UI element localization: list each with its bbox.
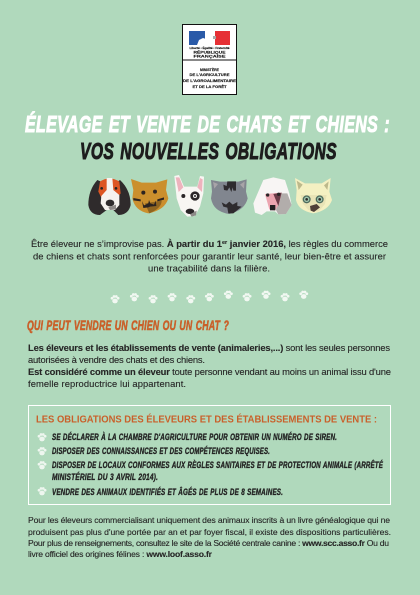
logo text xyxy=(183,45,237,89)
icon: poodle xyxy=(253,177,292,215)
logo text: ET DE LA FORÊT xyxy=(192,84,227,89)
text block: who can sell xyxy=(28,342,391,389)
logo: ministère xyxy=(182,24,237,94)
icon: beagle dog xyxy=(88,178,131,215)
logo text: FRANÇAISE xyxy=(194,54,226,58)
logo text: RÉPUBLIQUE xyxy=(194,50,226,54)
intro text block: Être éleveur ne s’improvise pas. À partir du 1 xyxy=(31,238,222,249)
text block: who can sell: femelle reproductrice lui appartenant. xyxy=(28,378,186,389)
intro text block: janvier 2016, xyxy=(227,238,286,249)
text block: who can sell: Est considéré comme un éleveur toute personne vendant au moins un animal issu d'une xyxy=(28,366,391,377)
footer note: livre officiel des origines félines : www.loof.asso.fr xyxy=(28,549,213,559)
icon: siamese cat xyxy=(295,178,332,213)
heading: qui peut vendre: QUI PEUT VENDRE UN CHIEN OU UN CHAT ? xyxy=(27,318,229,333)
intro text block: de chiens et chats sont renforcées pour garantir leur santé, leur bien-être et assurer xyxy=(33,250,386,262)
obligations list: DISPOSER DES CONNAISSANCES ET DES COMPÉTENCES REQUISES. xyxy=(52,445,270,456)
bullet paw icons xyxy=(38,433,46,495)
title xyxy=(25,110,390,164)
obligations list: VENDRE DES ANIMAUX IDENTIFIÉS ET ÂGÉS DE PLUS DE 8 SEMAINES. xyxy=(52,486,283,497)
panel heading: LES OBLIGATIONS DES ÉLEVEURS ET DES ÉTABLISSEMENTS DE VENTE : xyxy=(36,412,377,426)
icon: french flag marianne xyxy=(189,31,230,45)
footer note: Pour plus de renseignements, consultez le site de la Société centrale canine : www.scc.asso.fr Ou du xyxy=(28,538,389,548)
footer note: produisent pas plus d'une portée par an et par foyer fiscal, il existe des dispositions particulières. xyxy=(28,527,391,537)
text block: who can sell: Les éleveurs et les établissements de vente (animaleries,...) sont les seules personnes xyxy=(28,342,390,353)
footer note: Pour les éleveurs commercialisant uniquement des animaux inscrits à un livre généalogique qui ne xyxy=(28,515,390,525)
logo text: Liberté • Égalité • Fraternité xyxy=(190,45,230,50)
obligations list xyxy=(52,431,383,497)
animal faces row xyxy=(88,175,332,217)
panel: obligations xyxy=(28,406,390,504)
icon: grey cat xyxy=(211,179,248,214)
icon: ginger cat xyxy=(131,179,168,213)
icon: bull terrier xyxy=(174,175,204,217)
logo text: DE L'AGROALIMENTAIRE xyxy=(183,79,237,83)
intro text block: les règles du commerce xyxy=(289,238,388,249)
intro text block: er xyxy=(222,240,228,246)
footer note xyxy=(28,515,391,559)
intro text block: une traçabilité dans la filière. xyxy=(148,262,270,274)
obligations list: MINISTÉRIEL DU 3 AVRIL 2014). xyxy=(52,471,158,482)
intro text block xyxy=(31,238,388,274)
paw print trail xyxy=(111,291,308,303)
text block: who can sell: autorisées à vendre des chats et des chiens. xyxy=(28,354,205,365)
logo text: MINISTÈRE xyxy=(200,67,219,72)
logo text: DE L'AGRICULTURE xyxy=(190,73,230,77)
